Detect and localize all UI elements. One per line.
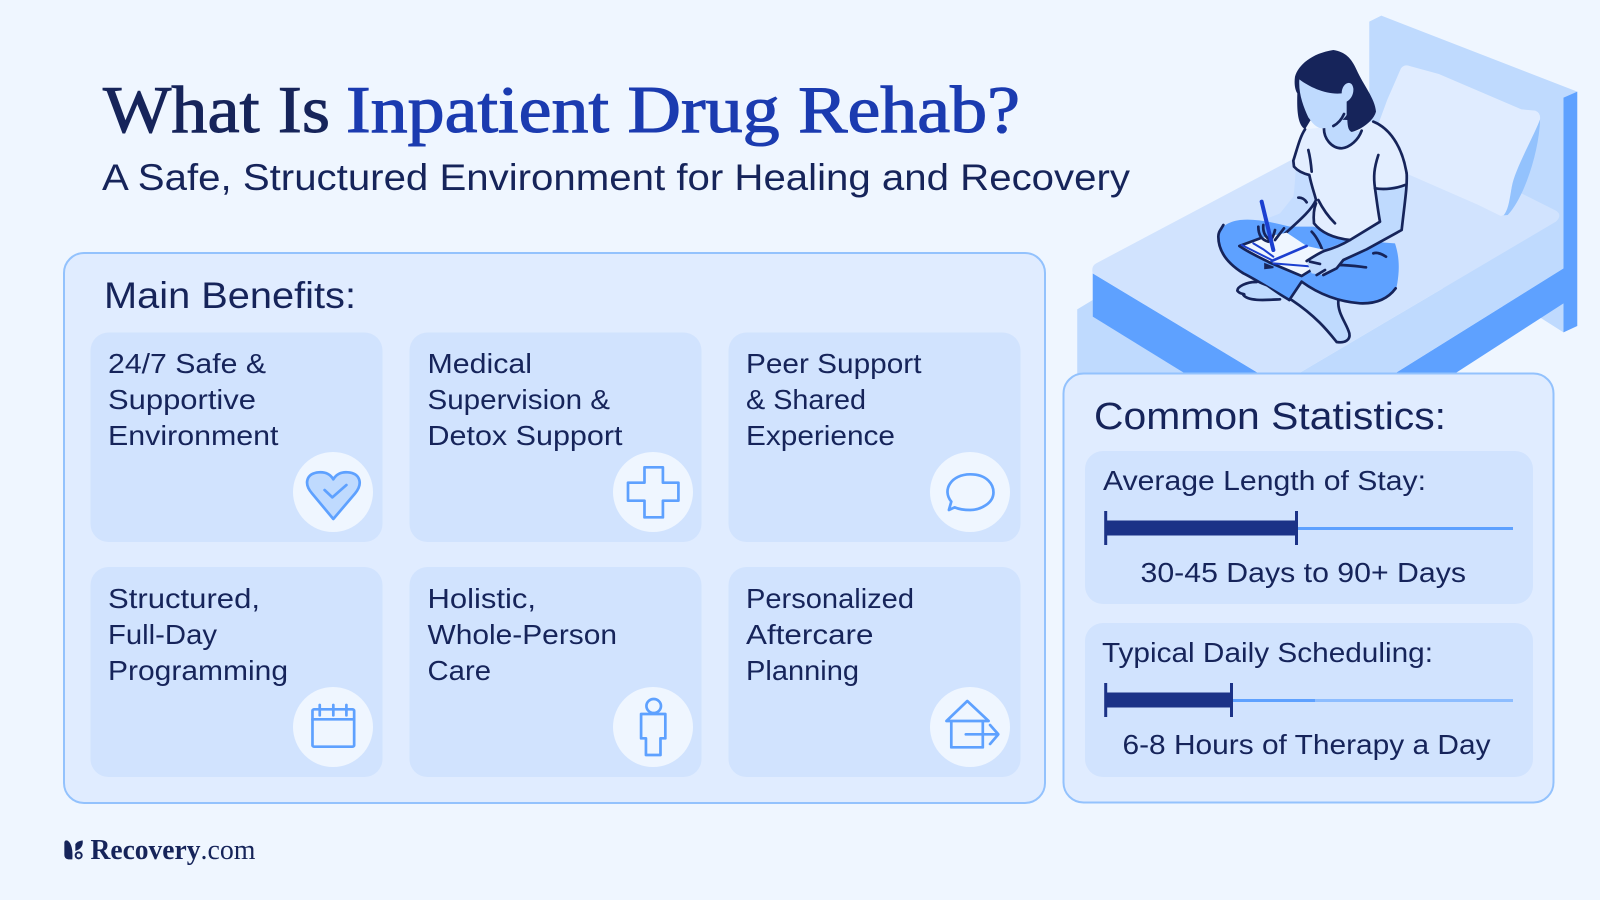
- panel: common statistics: [1064, 374, 1554, 802]
- icon: house with arrow: [946, 701, 998, 747]
- logo: Recovery.com: .com: [200, 835, 256, 866]
- card: medical supervision: Detox Support: [428, 420, 623, 451]
- icon: person: [641, 699, 665, 755]
- hair: [1295, 50, 1376, 132]
- title: What Is: [103, 73, 330, 147]
- card: holistic care: Care: [428, 655, 491, 686]
- card: safe environment: 24/7 Safe &: [108, 348, 266, 379]
- neck: [1324, 117, 1362, 148]
- card: medical supervision: Supervision &: [428, 384, 610, 415]
- title highlight: Inpatient Drug Rehab?: [346, 73, 1020, 147]
- card: aftercare planning: Planning: [746, 655, 859, 686]
- illustration: person journaling on a bed: [1077, 16, 1577, 375]
- writing hand: [1258, 225, 1284, 242]
- card: safe environment: Supportive: [108, 384, 256, 415]
- pillow: [1379, 65, 1540, 216]
- arm: [1307, 185, 1405, 275]
- logo mark: [64, 840, 83, 859]
- person: [1218, 50, 1407, 342]
- bar: length of stay: [1104, 511, 1513, 545]
- card: structured programming: Full-Day: [108, 619, 217, 650]
- icon: heart with check: [307, 472, 360, 519]
- card: holistic care: Holistic,: [428, 583, 536, 614]
- heading: main benefits: Main Benefits:: [104, 275, 356, 316]
- stat card: daily scheduling: Typical Daily Scheduling:: [1102, 637, 1433, 668]
- front foot: [1292, 282, 1350, 342]
- stat card: daily scheduling: 6-8 Hours of Therapy a Day: [1122, 729, 1490, 760]
- back arm: [1258, 167, 1316, 240]
- stat card: length of stay: [1085, 451, 1533, 604]
- card: peer support: & Shared: [746, 384, 866, 415]
- card: holistic care: Whole-Person: [428, 619, 617, 650]
- icon: calendar: [312, 705, 354, 747]
- card: aftercare planning: [728, 567, 1020, 777]
- pants: [1218, 220, 1399, 303]
- icon: medical cross: [628, 467, 678, 517]
- heading: common statistics: Common Statistics:: [1094, 396, 1446, 438]
- card: aftercare planning: Aftercare: [746, 619, 874, 650]
- card: structured programming: Structured,: [108, 583, 260, 614]
- card: structured programming: [90, 567, 382, 777]
- face: [1299, 79, 1353, 128]
- card: safe environment: [90, 332, 382, 542]
- bed: [1077, 16, 1577, 375]
- card: structured programming: Programming: [108, 655, 288, 686]
- card: aftercare planning: Personalized: [746, 583, 914, 614]
- stat card: length of stay: 30-45 Days to 90+ Days: [1140, 557, 1466, 588]
- shirt: [1293, 122, 1407, 240]
- stat card: daily scheduling: [1085, 623, 1533, 777]
- stat card: length of stay: Average Length of Stay:: [1103, 465, 1426, 496]
- card: peer support: Experience: [746, 420, 895, 451]
- logo: Recovery.com: [64, 835, 256, 866]
- card: safe environment: Environment: [108, 420, 279, 451]
- logo: Recovery.com: Recovery: [90, 835, 200, 866]
- card: holistic care: [410, 567, 702, 777]
- card: medical supervision: Medical: [428, 348, 532, 379]
- card: peer support: Peer Support: [746, 348, 922, 379]
- pen: [1262, 202, 1273, 250]
- bar: daily scheduling: [1104, 683, 1513, 717]
- card: peer support: [728, 332, 1020, 542]
- panel: main benefits: [64, 253, 1045, 803]
- subtitle: A Safe, Structured Environment for Healing and Recovery: [102, 157, 1131, 198]
- icon: speech bubble: [947, 474, 993, 510]
- card: medical supervision: [410, 332, 702, 542]
- back foot: [1237, 283, 1285, 300]
- open book: [1239, 233, 1325, 276]
